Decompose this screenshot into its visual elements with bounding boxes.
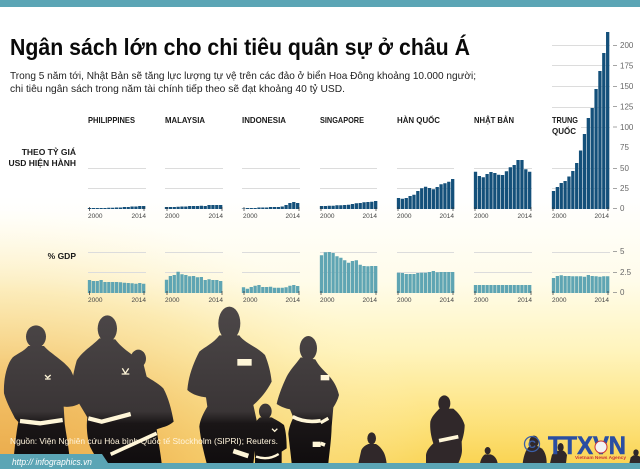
- chart: South Korea GDP: [398, 271, 453, 293]
- runner 11: [629, 449, 640, 463]
- intro text: Trong 5 năm tới, Nhật Bản sẽ tăng lực lượng tự vệ trên các đảo ở biển Hoa Đông khoảng 10.000 người;: [10, 70, 476, 82]
- country headings: MALAYSIA: [165, 115, 205, 125]
- USD axis: 200: [620, 41, 634, 50]
- year labels GDP: 2014: [286, 297, 300, 304]
- year labels GDP: 2000: [552, 297, 567, 304]
- year labels USD: 2014: [440, 213, 454, 220]
- year labels GDP: 2014: [132, 297, 146, 304]
- country headings: HÀN QUỐC: [397, 114, 440, 125]
- chart: Singapore GDP: [322, 252, 376, 293]
- runner 8: [480, 447, 498, 463]
- country headings: SINGAPORE: [320, 115, 364, 125]
- chart: China GDP: [554, 275, 608, 293]
- chart: Indonesia USD: [244, 202, 298, 209]
- year labels USD: 2000: [474, 213, 489, 220]
- row label: USD: USD HIỆN HÀNH: [8, 157, 76, 168]
- chart: Indonesia GDP: [244, 285, 298, 293]
- chart: Japan USD: [476, 160, 530, 209]
- year labels USD: 2014: [518, 213, 532, 220]
- year labels USD: 2000: [552, 213, 567, 220]
- country headings: NHẬT BẢN: [474, 114, 514, 125]
- year labels USD: 2000: [243, 213, 258, 220]
- year labels GDP: 2000: [474, 297, 489, 304]
- source: Nguồn: Viện Nghiên cứu Hòa bình Quốc tế Stockholm (SIPRI); Reuters.: [10, 436, 278, 446]
- site url: http:// infographics.vn: [12, 457, 92, 467]
- USD axis: 50: [620, 164, 629, 173]
- runner 5: [277, 336, 339, 463]
- USD axis: 25: [620, 184, 629, 193]
- year labels USD: 2014: [595, 213, 609, 220]
- year labels USD: 2014: [286, 213, 300, 220]
- chart: Malaysia USD: [166, 205, 221, 209]
- intro text: chi tiêu ngân sách trong năm tài chính tiếp theo sẽ đạt khoảng 40 tỷ USD.: [10, 83, 345, 95]
- chart: Philippines USD: [90, 206, 144, 209]
- reflective belts: [20, 362, 458, 458]
- chart: Singapore USD: [322, 201, 376, 209]
- logo: copyright TTXVN: C: [528, 439, 536, 451]
- photo: distant runners: [358, 395, 640, 463]
- year labels GDP: 2000: [397, 297, 412, 304]
- year labels GDP: 2000: [165, 297, 180, 304]
- USD axis: 75: [620, 143, 629, 152]
- GDP axis: 2.5: [620, 268, 632, 277]
- gridlines: [88, 46, 610, 272]
- GDP axis: [613, 247, 632, 297]
- photo: runners silhouettes left: [4, 307, 339, 463]
- runner 1: [4, 325, 81, 463]
- chart: Philippines GDP: [90, 280, 144, 293]
- year labels GDP: 2014: [595, 297, 609, 304]
- USD axis: 175: [620, 62, 634, 70]
- year labels GDP: 2014: [440, 297, 454, 304]
- logo: copyright TTXVN: TTXVN: [548, 432, 626, 460]
- chart: Malaysia GDP: [166, 272, 221, 293]
- runner 4 small: [255, 404, 287, 463]
- country headings: INDONESIA: [242, 115, 286, 125]
- logo: copyright TTXVN: Vietnam News Agency: [575, 455, 627, 460]
- USD axis: [613, 41, 634, 213]
- year labels USD: [88, 213, 609, 220]
- year labels GDP: 2000: [243, 297, 258, 304]
- USD axis: 100: [620, 123, 634, 132]
- year labels USD: 2000: [397, 213, 412, 220]
- country headings: TRUNG: [552, 115, 578, 125]
- country headings: PHILIPPINES: [88, 115, 135, 125]
- top band: [0, 0, 640, 7]
- chart: China USD: [554, 32, 608, 209]
- year labels GDP: [88, 297, 609, 304]
- runner 3: [187, 307, 272, 463]
- runner 7: [358, 432, 387, 463]
- title: Ngân sách lớn cho chi tiêu quân sự ở châu Á: [10, 33, 470, 60]
- year labels USD: 2000: [320, 213, 335, 220]
- year labels USD: 2014: [209, 213, 223, 220]
- GDP axis: 0: [620, 288, 625, 297]
- year labels USD: 2014: [363, 213, 377, 220]
- row label: USD: [8, 146, 76, 168]
- year ticks: [90, 207, 608, 295]
- intro text: [10, 70, 476, 95]
- GDP axis: 5: [620, 247, 625, 256]
- year labels GDP: 2014: [209, 297, 223, 304]
- runner 2: [72, 315, 174, 463]
- year labels GDP: 2000: [88, 297, 103, 304]
- runner 6: [426, 395, 465, 463]
- USD axis: 150: [620, 82, 634, 91]
- runner 10: [550, 443, 567, 463]
- chart: Japan GDP: [476, 285, 530, 293]
- USD axis: 0: [620, 204, 625, 213]
- year labels GDP: 2014: [363, 297, 377, 304]
- year labels GDP: 2000: [320, 297, 335, 304]
- year labels USD: 2000: [88, 213, 103, 220]
- year labels USD: 2014: [132, 213, 146, 220]
- row label: GDP: % GDP: [48, 251, 76, 261]
- bottom band and tab: [0, 454, 640, 469]
- year labels USD: 2000: [165, 213, 180, 220]
- chart: South Korea USD: [398, 179, 453, 209]
- USD axis: 125: [620, 102, 634, 112]
- runner 9: [523, 436, 547, 463]
- year labels GDP: 2014: [518, 297, 532, 304]
- country headings: QUỐC: [552, 125, 576, 136]
- row label: USD: THEO TỶ GIÁ: [22, 146, 76, 157]
- country headings: [88, 114, 578, 136]
